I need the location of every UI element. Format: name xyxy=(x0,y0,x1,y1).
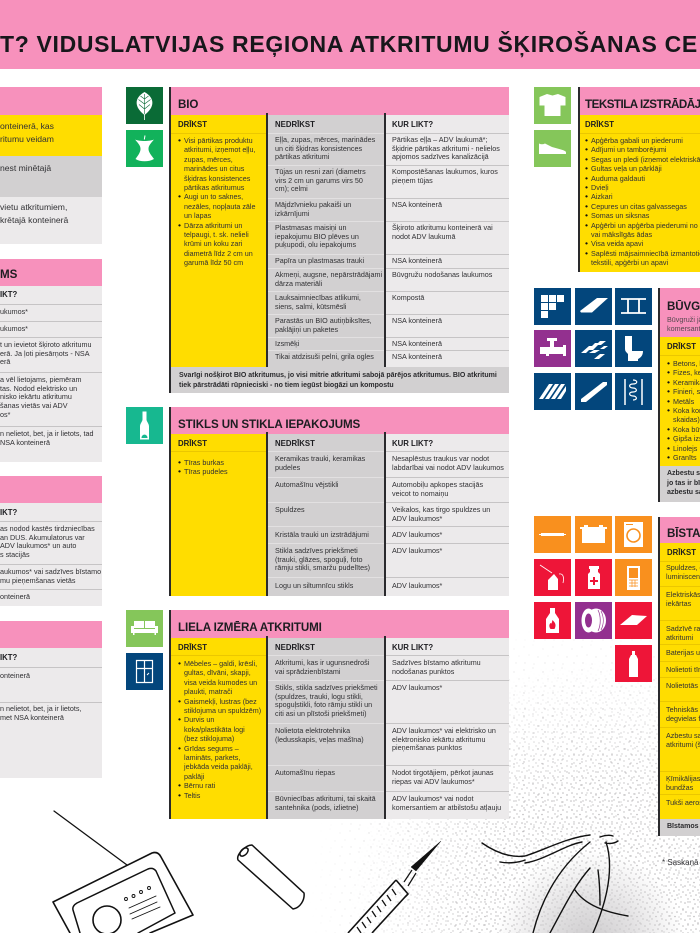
panel: construction waste xyxy=(658,288,700,502)
icon: t-shirt xyxy=(534,87,571,124)
column: forbidden: Nolietota elektrotehnika xyxy=(275,726,350,735)
column: where to put: elektronisko iekārtu atkritumu xyxy=(392,735,485,744)
column: forbidden: iepakojumu BIO plēves un xyxy=(275,232,359,241)
column: forbidden xyxy=(268,434,384,596)
column: allowed: pārtikas atkritumus xyxy=(184,183,244,192)
icon: plank xyxy=(575,373,612,410)
panel: textile xyxy=(578,87,700,272)
column: where to put: Sadzīves bīstamo atkritumu xyxy=(392,658,481,667)
note: asbestos xyxy=(660,466,700,502)
panel: BIO xyxy=(169,87,509,393)
column: allowed: diametrā līdz 2 cm un xyxy=(184,249,253,258)
icon: steel beam xyxy=(615,288,652,325)
column: forbidden: Tūjas un resni zari (diametrs xyxy=(275,167,366,176)
column: forbidden: Eļļa, zupas, mērces, marinādes xyxy=(275,135,375,144)
icon: fluorescent tube xyxy=(534,516,571,553)
column: where to put xyxy=(386,434,509,596)
column: forbidden: (trauki, glāzes, spoguļi, foto xyxy=(275,555,362,564)
column: where to put: Automobiļu apkopes stacijās xyxy=(392,480,483,489)
column: forbidden: un citi šķidras konsistences xyxy=(275,144,362,153)
text: forbidden rule: nest minētajā xyxy=(0,163,51,173)
panel: left table 2 (cropped): erā. Ja ļoti piesārņots - NSA xyxy=(0,349,89,358)
column: where to put: NSA konteinerā xyxy=(392,256,442,265)
text: place rule: vietu atkritumiem, xyxy=(0,202,67,212)
icon: oil can xyxy=(534,559,571,596)
icon: pallet xyxy=(534,373,571,410)
column: where to put: apjomos sadzīves kanalizācijā xyxy=(392,152,489,161)
column: allowed: Cepures un citas galvassegas xyxy=(591,202,687,211)
column: forbidden: (spuldzes, trauki, logu stikli, xyxy=(275,692,363,701)
column: where to put xyxy=(386,638,509,819)
column: forbidden: NEDRĪKST xyxy=(275,439,315,448)
column: forbidden: Izsmēķi xyxy=(275,339,299,348)
column: where to put: KUR LIKT? xyxy=(392,120,433,129)
column: forbidden: Stikla sadzīves priekšmeti xyxy=(275,546,358,555)
column: forbidden: vai sprādzienbīstami xyxy=(275,667,341,676)
column: allowed: Saplēsti mājsaimniecībā izmantotie xyxy=(591,249,700,258)
icon: washing machine xyxy=(615,516,652,553)
column: allowed: zupas, mērces, xyxy=(184,155,233,164)
column: where to put: ADV laukumos* xyxy=(392,530,442,539)
column: where to put: Šķiroto atkritumu konteinerā vai xyxy=(392,223,493,232)
column: forbidden: Atkritumi, kas ir ugunsnedroši xyxy=(275,658,369,667)
column: where to put: pieņem tūjas xyxy=(392,176,433,185)
panel: left table 2 (cropped): n nelietot, bet, ja ir lietots, tad xyxy=(0,429,94,438)
column: where to put: nodošanas punktos xyxy=(392,667,454,676)
panel: left table 2 (cropped) xyxy=(0,259,102,462)
column: forbidden: virs 2 cm un garums virs 50 xyxy=(275,176,363,185)
column: allowed xyxy=(171,638,266,819)
panel: left table 4 (cropped): n nelietot, bet, ja ir lietots, xyxy=(0,704,82,713)
column: allowed xyxy=(660,337,700,466)
column: allowed: Linolejs xyxy=(673,444,697,453)
column: allowed: Teltis xyxy=(184,791,200,800)
column: allowed: jebkāda veida paklāji, xyxy=(184,762,253,771)
panel: left table 3 (cropped) xyxy=(0,476,102,606)
column: forbidden: Mājdzīvnieku pakaiši un xyxy=(275,200,351,209)
column: allowed: Adījumi un tamborējumi xyxy=(591,145,667,154)
column: allowed: tekstili, apģērbi un apavi xyxy=(591,258,668,267)
column: allowed: Bērnu rati xyxy=(184,781,215,790)
column: allowed: iekārtas xyxy=(666,599,691,608)
icon: tyre xyxy=(575,602,612,639)
column: where to put: ADV laukumos* xyxy=(392,514,442,523)
panel: left table 2 (cropped): os* xyxy=(0,410,10,419)
icon: toilet xyxy=(615,330,652,367)
column: where to put: ADV laukumos* vai nodot xyxy=(392,794,474,803)
icon: shoe xyxy=(534,130,571,167)
column: where to put: NSA konteinerā xyxy=(392,200,442,209)
panel: left table 3 (cropped): s stacijās xyxy=(0,550,30,559)
column: where to put: Būvgružu nodošanas laukumos xyxy=(392,270,492,279)
panel: left table 2 (cropped): t un ievietot šķiroto atkritumu xyxy=(0,340,91,349)
column: allowed: Gaismekļi, lustras (bez xyxy=(184,697,257,706)
icon: sofa xyxy=(126,610,163,647)
column: allowed xyxy=(171,434,266,596)
note: BIO importance: tiek pārstrādāti rūpnieciski - no tiem iegūst biogāzi un kompostu xyxy=(179,382,394,388)
column: forbidden: Būvniecības atkritumi, tai skaitā xyxy=(275,794,376,803)
column: forbidden: pudeles xyxy=(275,463,300,472)
column: allowed: Gultas veļa un pārklāji xyxy=(591,164,662,173)
column: allowed: Augi un to saknes, xyxy=(184,192,243,201)
column: forbidden: dārza materiāli xyxy=(275,279,322,288)
column: allowed: atkritumi xyxy=(666,633,693,642)
column: where to put: pieņemšanas punktos xyxy=(392,743,462,752)
column: forbidden: Logu un siltumnīcu stikls xyxy=(275,581,353,590)
column: allowed: stiklojuma un spuldzēm) xyxy=(184,706,261,715)
illustration: syringe xyxy=(348,840,442,933)
column: allowed: DRĪKST xyxy=(667,548,696,557)
icon: tiles xyxy=(534,288,571,325)
panel: left table 2 (cropped): nisko iekārtu atkritumu xyxy=(0,392,72,401)
panel: large waste xyxy=(169,610,509,819)
column: allowed: Visa veida apavi xyxy=(591,239,643,248)
panel: left table 2 (cropped): ukumos* xyxy=(0,307,28,316)
column: forbidden xyxy=(268,638,384,819)
column: allowed xyxy=(580,115,700,272)
illustration: radio xyxy=(52,810,194,933)
column: where to put xyxy=(386,115,509,367)
column: where to put: ADV laukumos* xyxy=(392,581,442,590)
column: allowed: DRĪKST xyxy=(585,120,614,129)
column: allowed xyxy=(660,543,700,819)
note: BIO importance xyxy=(171,367,509,393)
column: where to put: riepas vai ADV laukumos* xyxy=(392,777,475,786)
column: allowed: krūmi un koku zari xyxy=(184,239,242,248)
column: where to put: Nesaplēstus traukus var nodot xyxy=(392,454,489,463)
column: allowed: Mēbeles – galdi, krēsli, xyxy=(184,659,257,668)
column: allowed: šķidras konsistences xyxy=(184,174,250,183)
icon: asbestos roof xyxy=(615,602,652,639)
icon: pipe xyxy=(534,330,571,367)
column: where to put: Veikalos, kas tirgo spuldzes un xyxy=(392,505,490,514)
column: where to put: NSA konteinerā xyxy=(392,352,442,361)
column: forbidden: pārtikas atkritumi xyxy=(275,152,329,161)
column: forbidden: Kristāla trauki un izstrādājumi xyxy=(275,530,369,539)
panel: left table 2 (cropped): a vēl lietojams, piemēram xyxy=(0,375,82,384)
column: allowed: telpaugi, t. sk. nelieli xyxy=(184,230,249,239)
column: where to put: NSA konteinerā xyxy=(392,339,442,348)
column header: IKT? xyxy=(0,508,17,517)
column: allowed: lamināts, parkets, xyxy=(184,753,240,762)
column: forbidden: NEDRĪKST xyxy=(275,120,315,129)
column: where to put: Kompostā xyxy=(392,293,424,302)
column: forbidden: izkārnījumi xyxy=(275,209,309,218)
column: allowed: Grīdas segums – xyxy=(184,744,239,753)
column: allowed: bundžas xyxy=(666,783,693,792)
column: where to put: ADV laukumos* xyxy=(392,683,442,692)
column: where to put: Kompostēšanas laukumos, kuros xyxy=(392,167,498,176)
column: forbidden: Stikls, stikla sadzīves priekšmeti xyxy=(275,683,378,692)
column: allowed: visa veida kumodes un xyxy=(184,678,257,687)
column: forbidden: paklājiņi un paketes xyxy=(275,325,338,334)
column: allowed: DRĪKST xyxy=(178,439,207,448)
column: forbidden: Automašīnu vējstikli xyxy=(275,480,339,489)
panel: left table 3 (cropped): onteinerā xyxy=(0,592,30,601)
column: forbidden: santehnika (pods, izlietne) xyxy=(275,803,359,812)
text: place rule: krētajā konteinerā xyxy=(0,215,68,225)
icon: insulation xyxy=(615,373,652,410)
column: forbidden: Parastās un BIO autiņbiksītes, xyxy=(275,316,372,325)
column: allowed: Durvis un xyxy=(184,715,214,724)
panel: left table 3 (cropped): ADV laukumos* un auto xyxy=(0,541,76,550)
column: forbidden: (ledusskapis, veļas mašīna) xyxy=(275,735,364,744)
column: allowed: Granīts xyxy=(673,453,697,462)
column: allowed: skaidas) xyxy=(673,415,700,424)
panel: left table 4 (cropped): met NSA konteinerā xyxy=(0,713,64,722)
icon: bottle xyxy=(126,407,163,444)
text: allowed rule: onteinerā, kas xyxy=(0,121,54,131)
title banner xyxy=(0,0,700,69)
column: forbidden xyxy=(268,115,384,367)
column: allowed: Metāls xyxy=(673,397,694,406)
panel: left table 4 (cropped): onteinerā xyxy=(0,671,30,680)
column: allowed: Tīras burkas xyxy=(184,458,224,467)
column: forbidden: siens, salmi, kūtsmēsli xyxy=(275,302,346,311)
column: where to put: ADV laukumos* vai elektrisko un xyxy=(392,726,496,735)
column: allowed: garumā līdz 50 cm xyxy=(184,258,243,267)
panel: left table 2 (cropped): ukumos* xyxy=(0,324,28,333)
icon: panel board xyxy=(575,288,612,325)
column: allowed: Apģērba gabali un piederumi xyxy=(591,136,683,145)
column: allowed: DRĪKST xyxy=(178,120,207,129)
panel: left table 3 (cropped): an DUS. Akumulatorus var xyxy=(0,533,85,542)
panel: left table 3 (cropped): aukumos* vai sadzīves bīstamo xyxy=(0,567,101,576)
column: where to put: veicot to nomaiņu xyxy=(392,489,448,498)
column: allowed: koka/plastikāta logi xyxy=(184,725,245,734)
text: place rule xyxy=(0,202,68,225)
column: forbidden: Akmeņi, augsne, nepārstrādājami xyxy=(275,270,382,279)
column: forbidden: spoguļstikli, foto rāmju stikli un xyxy=(275,700,372,709)
column: allowed: (bez stiklojuma) xyxy=(184,734,234,743)
column: forbidden: Lauksaimniecības atlikumi, xyxy=(275,293,361,302)
icon: mobile phone xyxy=(615,559,652,596)
column: forbidden: Papīra un plastmasas trauki xyxy=(275,256,364,265)
heading: BIO: BIO xyxy=(178,98,198,111)
column: allowed: DRĪKST xyxy=(178,643,207,652)
column: allowed: Auduma galdauti xyxy=(591,174,645,183)
panel: general rules (cropped left) xyxy=(0,87,102,244)
column: allowed: Ķīmikālijas xyxy=(666,774,700,783)
column: allowed: nezāles, nopļauta zāle xyxy=(184,202,256,211)
column: forbidden: rāmju stikli, smaržu pudelītes) xyxy=(275,563,370,572)
column: allowed: Visi pārtikas produktu xyxy=(184,136,253,145)
icon: car battery xyxy=(575,516,612,553)
column: allowed: DRĪKST xyxy=(667,342,696,351)
column: forbidden: citi asi un plīstoši priekšmeti) xyxy=(275,709,366,718)
column: forbidden: puķupodi, olu iepakojums xyxy=(275,240,356,249)
column: allowed: Aizkari xyxy=(591,192,613,201)
note: BIO importance: Svarīgi nošķirot BIO atkritumus, jo visi mitrie atkritumi sabojā pārējos atkritumus. BIO atkritumi xyxy=(179,372,497,379)
column: where to put: šķidrie pārtikas atkritumi - nelielos xyxy=(392,144,500,153)
icon: medicine bottle xyxy=(575,559,612,596)
panel: left table 3 (cropped): mu pieņemšanas vietās xyxy=(0,576,76,585)
column: allowed: paklāji xyxy=(184,772,204,781)
note: hazardous xyxy=(660,819,700,836)
column: where to put: komersantiem ar atbilstošu atļauju xyxy=(392,803,501,812)
column header: IKT? xyxy=(0,290,17,299)
column: allowed: Tīras pudeles xyxy=(184,467,228,476)
heading fragment: MS xyxy=(0,268,17,281)
column: forbidden: Automašīnu riepas xyxy=(275,768,335,777)
panel: left table 3 (cropped): as nodod kastēs tirdzniecības xyxy=(0,524,95,533)
column: where to put: ADV laukumos* xyxy=(392,546,442,555)
panel: left table 2 (cropped): NSA konteinerā xyxy=(0,438,50,447)
illustration: battery xyxy=(236,844,305,910)
column: forbidden: Spuldzes xyxy=(275,505,305,514)
title banner: T? VIDUSLATVIJAS REĢIONA ATKRITUMU ŠĶIROŠANAS CE xyxy=(0,31,698,57)
column: allowed: atkritumi, izņemot eļļu, xyxy=(184,145,256,154)
column: where to put: NSA konteinerā xyxy=(392,316,442,325)
column: forbidden: Keramikas trauki, keramikas xyxy=(275,454,365,463)
panel: left table 2 (cropped): erā xyxy=(0,357,10,366)
column: forbidden: Tikai atdzisuši pelni, grila ogles xyxy=(275,352,374,361)
column: allowed: Dārza atkritumi un xyxy=(184,221,242,230)
icon: flammable bottle xyxy=(534,602,571,639)
panel: left table 2 (cropped): tas. Nodod elektrisko un xyxy=(0,384,77,393)
text: allowed rule: ritumu veidam xyxy=(0,134,54,144)
illustration: hair xyxy=(481,834,629,933)
heading: large waste: LIELA IZMĒRA ATKRITUMI xyxy=(178,621,322,634)
icon: apple core xyxy=(126,130,163,167)
column: allowed: gultas, dīvāni, skapji, xyxy=(184,668,251,677)
panel: hazardous waste xyxy=(658,517,700,836)
column: forbidden: cm); celmi xyxy=(275,184,308,193)
column: allowed: plaukti, matrači xyxy=(184,687,232,696)
icon: window xyxy=(126,653,163,690)
icon: shingles xyxy=(575,330,612,367)
panel: left table 2 (cropped): šanas vietās vai ADV xyxy=(0,401,68,410)
column: allowed xyxy=(171,115,266,367)
column: where to put: Pārtikas eļļa – ADV laukumā*; xyxy=(392,135,487,144)
column: allowed: marinādes un citus xyxy=(184,164,244,173)
column: allowed: un lapas xyxy=(184,211,211,220)
text: allowed rule xyxy=(0,121,54,144)
column header: IKT? xyxy=(0,653,17,662)
column: where to put: labdarībai vai nodot ADV laukumos xyxy=(392,463,504,472)
icon: leaf xyxy=(126,87,163,124)
column: allowed: vai mākslīgās ādas xyxy=(591,230,652,239)
column: forbidden: Plastmasas maisiņi un xyxy=(275,223,347,232)
column: forbidden: NEDRĪKST xyxy=(275,643,315,652)
column: where to put: KUR LIKT? xyxy=(392,643,433,652)
column: allowed: Dvieļi xyxy=(591,183,609,192)
heading: glass: STIKLS UN STIKLA IEPAKOJUMS xyxy=(178,418,360,431)
icon: spray can xyxy=(615,645,652,682)
column: where to put: nodot ADV laukumā xyxy=(392,232,456,241)
column: allowed: Somas un siksnas xyxy=(591,211,649,220)
panel: left table 4 (cropped) xyxy=(0,621,102,778)
panel: glass xyxy=(169,407,509,596)
column: where to put: Nodot tirgotājiem, pērkot jaunas xyxy=(392,768,493,777)
column: where to put: KUR LIKT? xyxy=(392,439,433,448)
text: construction subtitle xyxy=(667,315,700,333)
